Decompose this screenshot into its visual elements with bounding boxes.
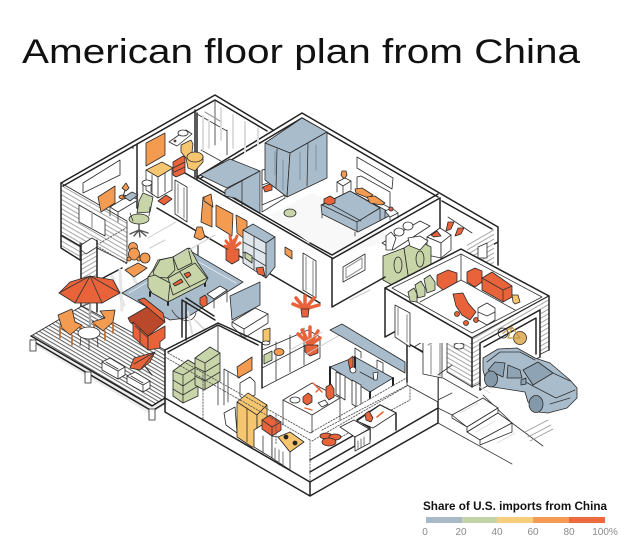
gray bin — [478, 303, 495, 325]
room outline — [165, 323, 262, 388]
mirror — [146, 133, 165, 166]
white cabinet — [427, 228, 451, 258]
red kettle — [365, 411, 373, 422]
cut wall — [310, 360, 438, 482]
legend labels: 40 — [491, 527, 503, 538]
wardrobe right — [265, 118, 327, 197]
low wall — [182, 298, 215, 340]
legend labels: 80 — [563, 527, 575, 538]
back walls — [61, 95, 498, 229]
orange notice — [237, 357, 252, 378]
small umbrella — [130, 352, 155, 375]
patio chair left — [58, 309, 82, 345]
suitcases — [408, 275, 435, 302]
floor lamp — [194, 227, 205, 282]
legend — [422, 499, 618, 538]
office — [98, 183, 153, 237]
red pots — [320, 433, 341, 446]
pillows — [355, 188, 373, 198]
wardrobe left — [200, 159, 260, 213]
framed pictures — [201, 194, 247, 241]
dishwasher — [254, 425, 290, 470]
umbrella pole — [89, 300, 91, 332]
dotted bedroom rug — [270, 193, 395, 256]
steps and driveway — [438, 365, 553, 464]
stroller — [453, 293, 478, 326]
kitchen and hall floor lines — [148, 222, 370, 355]
side table — [200, 286, 227, 308]
patio chair right — [92, 310, 115, 340]
bath rug — [158, 195, 172, 205]
entry door — [423, 330, 442, 378]
laundry room — [332, 198, 498, 307]
legend labels — [422, 527, 618, 538]
microwave — [262, 415, 281, 436]
storage cabinet — [262, 327, 320, 388]
garage room — [385, 249, 549, 338]
bike — [498, 327, 526, 344]
potted plant — [298, 327, 320, 356]
cooktop — [278, 432, 304, 452]
hall wall — [157, 173, 332, 303]
floor mat — [125, 263, 147, 277]
laundry window — [343, 254, 365, 282]
bedroom — [200, 118, 440, 259]
kitchen block — [165, 323, 438, 496]
wheels — [484, 371, 498, 387]
entry and garage block — [385, 249, 549, 390]
runner rug — [330, 324, 405, 373]
car — [483, 348, 577, 413]
desk lamp — [119, 183, 129, 199]
throw pillow — [324, 196, 335, 205]
red bag — [467, 268, 482, 287]
stool — [142, 180, 152, 192]
island — [283, 383, 340, 433]
sink shelf — [169, 130, 192, 146]
deck floor — [31, 306, 165, 406]
side door — [395, 305, 410, 347]
garage left wall — [385, 288, 472, 343]
legend labels: 20 — [455, 527, 467, 538]
base cabinets — [310, 405, 396, 472]
rug — [122, 252, 243, 320]
rear siding — [467, 229, 494, 265]
shower lines — [203, 108, 258, 152]
legend labels: 100% — [592, 527, 618, 538]
tv console — [232, 308, 268, 338]
pantry shelves — [173, 347, 220, 403]
grill — [128, 298, 165, 350]
title: American floor plan from China — [22, 33, 581, 71]
west room window — [83, 160, 120, 193]
boots — [512, 295, 520, 304]
monitor — [98, 186, 115, 212]
vanity — [146, 162, 173, 198]
bed picture — [357, 157, 393, 189]
legend labels: 0 — [422, 527, 428, 538]
left siding wall — [61, 183, 146, 312]
palm — [293, 296, 319, 317]
planter 1 — [102, 358, 125, 379]
closet door — [224, 369, 255, 405]
teddy bear — [127, 242, 141, 261]
porch column — [81, 238, 97, 312]
coffee maker — [262, 328, 270, 345]
hall door — [303, 253, 316, 298]
tv — [230, 282, 260, 320]
desk — [110, 195, 138, 222]
nightstand left — [337, 171, 351, 196]
office chair — [129, 193, 153, 237]
end wall — [407, 343, 438, 402]
washer — [383, 240, 431, 285]
bathroom — [142, 130, 203, 222]
toilet — [181, 140, 203, 171]
robot vacuum — [284, 209, 296, 217]
deck legs — [30, 340, 155, 420]
red toolbox — [437, 270, 457, 290]
fridge — [237, 393, 267, 447]
sofa — [148, 248, 208, 305]
garage front wall — [472, 296, 549, 387]
legend labels: 60 — [527, 527, 539, 538]
dining chairs — [336, 372, 361, 410]
red shelf — [173, 156, 185, 177]
planter 2 — [127, 372, 150, 392]
nightstand right — [385, 207, 398, 220]
garage siding — [447, 323, 472, 387]
bookcase — [243, 224, 275, 278]
big red box — [482, 272, 512, 302]
bath door — [175, 180, 187, 222]
legend bar — [426, 517, 605, 523]
headboard — [357, 176, 390, 208]
living room — [122, 242, 319, 350]
basketball — [140, 253, 150, 263]
bed — [321, 188, 389, 236]
hangers — [446, 217, 472, 236]
plant — [225, 236, 240, 264]
wardrobe shelves — [262, 165, 285, 212]
wall switch — [285, 247, 292, 259]
patio table — [78, 327, 100, 350]
washing nook — [224, 407, 237, 433]
patio umbrella — [59, 276, 120, 303]
laundry shelf — [382, 221, 430, 250]
legend title: Share of U.S. imports from China — [423, 499, 607, 513]
deck — [30, 276, 168, 420]
wall window — [79, 205, 105, 236]
dining table — [330, 348, 393, 410]
